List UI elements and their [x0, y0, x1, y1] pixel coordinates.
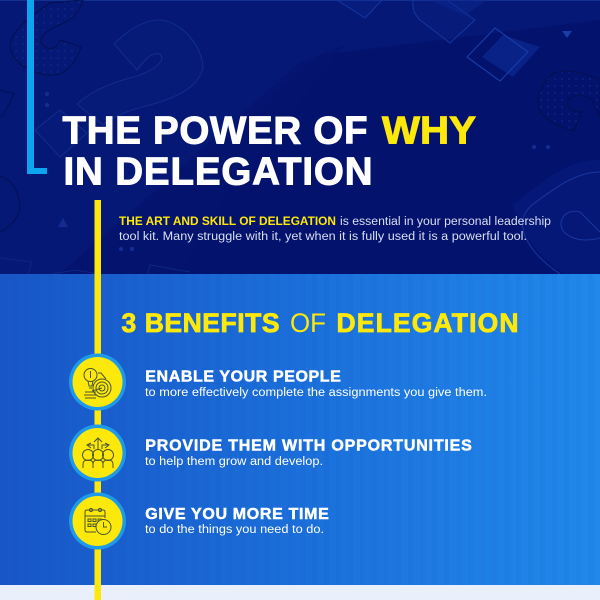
- section heading: DELEGATION: [336, 308, 518, 338]
- panel: pale bottom strip: [0, 585, 600, 600]
- background: shapes top right: [482, 35, 540, 77]
- section heading: OF: [290, 308, 326, 338]
- icon: light bulb and target: [84, 368, 111, 398]
- section heading: 3 BENEFITS: [122, 308, 280, 338]
- benefit 1 text: to more effectively complete the assignments you give them.: [145, 387, 487, 399]
- background: dark question mark right: [538, 71, 600, 131]
- panel: blue benefits background: [0, 274, 600, 585]
- accent: yellow vertical timeline: [94, 200, 101, 600]
- icon: team with upward arrows: [82, 438, 114, 468]
- benefit 1 text: [145, 368, 487, 399]
- background: dark fragments left: [0, 90, 20, 232]
- benefit 1 text: ENABLE YOUR PEOPLE: [145, 368, 341, 385]
- benefit 2 text: [145, 437, 472, 468]
- benefit 3 text: GIVE YOU MORE TIME: [145, 506, 329, 523]
- background: small dots and triangle left: [45, 92, 134, 251]
- accent: light blue L bracket: [27, 0, 47, 174]
- background: blue question mark bottom right: [513, 160, 600, 274]
- background: question mark light outline centre: [77, 20, 203, 125]
- intro text block: [119, 216, 551, 243]
- background: question mark dark outline top left: [10, 0, 83, 75]
- benefit 2 text: PROVIDE THEM WITH OPPORTUNITIES: [145, 437, 472, 454]
- title: WHY: [382, 110, 476, 153]
- benefit 1 badge: [69, 354, 126, 410]
- benefit 2 text: to help them grow and develop.: [145, 456, 323, 468]
- title: IN DELEGATION: [64, 151, 372, 194]
- title: [62, 110, 476, 194]
- section heading: [122, 308, 518, 338]
- benefit 3 badge: [69, 492, 126, 550]
- panel: dark navy header background: [0, 0, 600, 274]
- benefit 2 badge: [69, 424, 126, 482]
- background: diamond outline left: [35, 110, 87, 157]
- benefit 3 text: [145, 506, 329, 536]
- intro text block: is essential in your personal leadership: [340, 216, 551, 228]
- intro text block: THE ART AND SKILL OF DELEGATION: [119, 216, 336, 228]
- background: shapes bottom edge: [0, 258, 190, 274]
- icon: calendar and clock: [85, 508, 111, 534]
- title: THE POWER OF: [62, 110, 368, 153]
- benefit 3 text: to do the things you need to do.: [145, 524, 324, 536]
- intro text block: tool kit. Many struggle with it, yet when it is fully used it is a powerful tool.: [119, 231, 527, 243]
